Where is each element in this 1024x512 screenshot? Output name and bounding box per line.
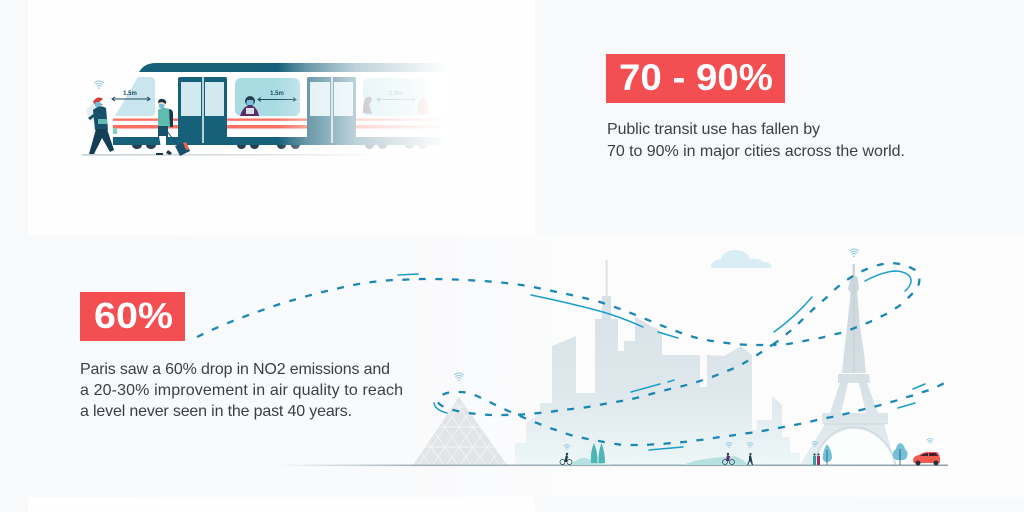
- distance marker 3 with passengers: 1.5m: [389, 91, 403, 97]
- red car: [913, 452, 940, 466]
- distance marker 1: [112, 91, 150, 101]
- description text: [607, 121, 905, 160]
- description text: [80, 361, 403, 420]
- seated passenger with laptop: [240, 96, 259, 116]
- wheels: [132, 145, 427, 149]
- badge: 60%: 60%: [94, 295, 173, 336]
- distance marker 2: [258, 91, 296, 102]
- pyramid: [413, 397, 507, 465]
- train fade overlay: [277, 60, 453, 152]
- platform line: [82, 154, 382, 156]
- panel: statistic 70-90%: [606, 54, 905, 160]
- red stripes: [113, 118, 452, 128]
- trees near tower: [823, 443, 908, 465]
- lower body band: [113, 137, 452, 145]
- description text: a 20-30% improvement in air quality to reach: [80, 382, 403, 399]
- dashed flight path: [197, 263, 947, 445]
- distance marker 2: 1.5m: [270, 91, 284, 97]
- Eiffel tower: [800, 264, 896, 465]
- panel: train illustration: [82, 60, 453, 156]
- cypress trees: [591, 443, 605, 463]
- person with mask and suitcase: [156, 99, 190, 156]
- panel: statistic 60%: [80, 292, 403, 420]
- door 1: [178, 77, 227, 143]
- skyline: [515, 260, 800, 465]
- window with passenger: [235, 78, 300, 116]
- distance marker 3 with passengers: [363, 91, 428, 114]
- icon: wifi signal: [94, 81, 104, 89]
- badge: 70 - 90%: [606, 54, 785, 103]
- solid wind lines: [398, 271, 925, 450]
- icons: wifi signals: [454, 249, 933, 450]
- badge: 60%: [80, 292, 185, 341]
- mounds: [570, 456, 748, 465]
- person walking with phone: [86, 98, 117, 154]
- description text: Public transit use has fallen by: [607, 121, 820, 138]
- badge: 70 - 90%: 70 - 90%: [619, 57, 773, 98]
- train: [113, 63, 452, 149]
- train front window: [115, 77, 155, 116]
- cyclists and pedestrians: [560, 453, 820, 465]
- description text: Paris saw a 60% drop in NO2 emissions and: [80, 361, 390, 378]
- window 3: [363, 78, 428, 116]
- cloud: [711, 250, 772, 268]
- description text: a level never seen in the past 40 years.: [80, 403, 352, 420]
- ground line: [280, 464, 948, 466]
- door 2: [307, 77, 356, 143]
- panel: Paris illustration: [197, 249, 948, 466]
- description text: 70 to 90% in major cities across the world.: [607, 143, 905, 160]
- distance marker 1: 1.5m: [123, 91, 137, 97]
